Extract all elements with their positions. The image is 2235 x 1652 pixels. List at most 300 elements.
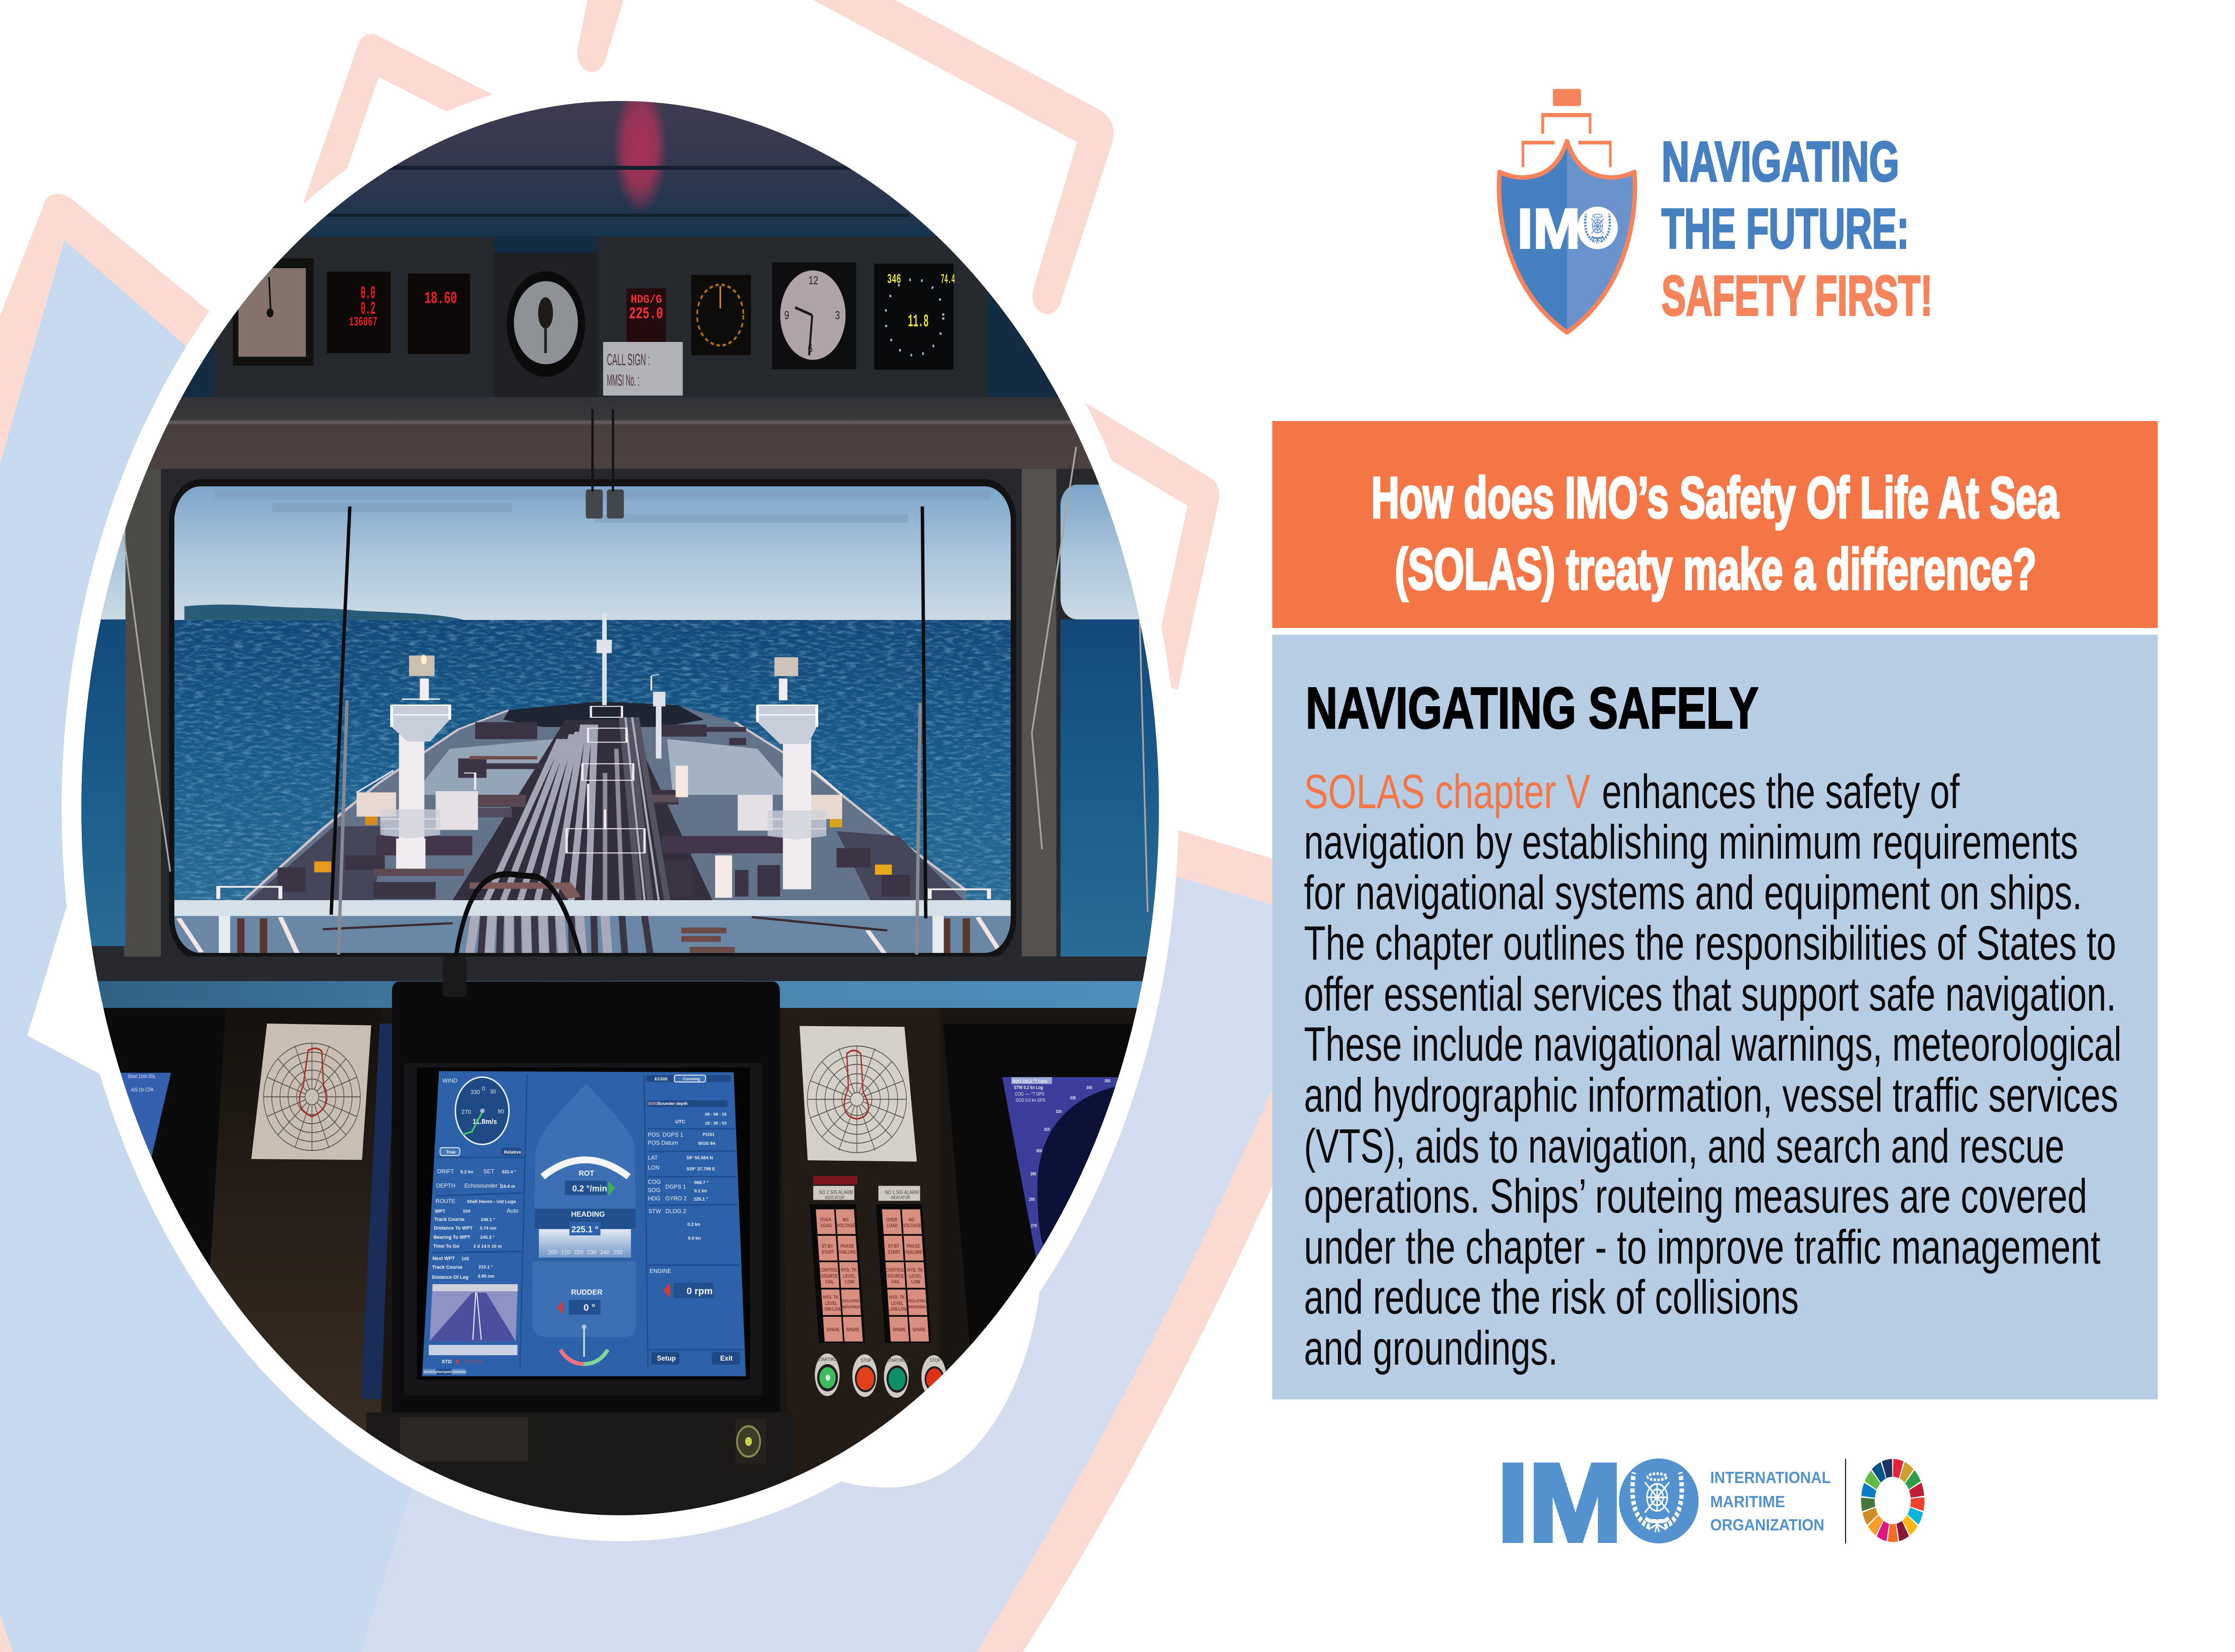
left data rows: Auto (507, 1208, 519, 1214)
right data rows: 59° 55.584 N (687, 1156, 713, 1161)
window rail bar (170, 900, 1014, 916)
tagline line 1: NAVIGATING (1661, 130, 1899, 193)
right data rows: 028° 37.799 E (687, 1167, 715, 1172)
right side radar screen: 290 (1030, 1171, 1036, 1176)
right data rows: 0.0 kn (688, 1236, 701, 1241)
alarm tiles left: ST-BY (822, 1244, 834, 1249)
left data rows: Shell Haven - Ust Luga (467, 1199, 516, 1204)
top right screen buttons: SENS (648, 1101, 658, 1106)
screen dividers (433, 1074, 743, 1367)
alarm tiles left: LOAD (820, 1223, 832, 1229)
left data rows: 105 (462, 1256, 469, 1262)
call sign plate: MMSI No. : (607, 371, 640, 389)
alarm tiles right: HYD. TK (889, 1295, 905, 1300)
start and stop push buttons: STOP (861, 1358, 872, 1364)
true and relative buttons: Relative (504, 1150, 521, 1155)
alarm label plates: NO 1 S/G ALARM (885, 1189, 919, 1196)
alarm label plates (813, 1186, 920, 1201)
white triangle left (27, 907, 204, 1074)
alarm tiles right: ISOLATING (908, 1298, 926, 1303)
left data rows: Distance To WPT (434, 1226, 473, 1231)
heading display: HDG/G (631, 293, 662, 306)
ship silhouette panel (534, 1083, 636, 1209)
alarm tiles left: NO (843, 1217, 849, 1223)
left data rows: DEPTH (436, 1183, 455, 1189)
setup and exit buttons (651, 1352, 740, 1365)
right data rows: POS1 (703, 1132, 715, 1137)
alarm tiles left: PHASE (840, 1244, 854, 1249)
alarm tiles right: HYD. TK (907, 1268, 924, 1273)
UN emblem (1632, 1472, 1682, 1532)
right data rows: LON (648, 1165, 659, 1171)
photo: ship bridge view (68, 80, 1175, 1564)
pink band right (1124, 813, 1272, 905)
right data rows: POS (648, 1132, 660, 1138)
right side radar screen: 310 (1044, 1127, 1050, 1132)
alarm label plates: INDICATOR (825, 1195, 844, 1200)
heading display: 225.0 (629, 305, 663, 323)
cross pipes (314, 756, 892, 898)
dark pipe bed (452, 720, 713, 900)
alarm tiles right: OVER (886, 1217, 898, 1223)
right data rows: LAT (648, 1155, 658, 1161)
alarm tiles right: ST-BY (888, 1244, 899, 1249)
call sign plate (603, 342, 683, 396)
left data rows: SET (483, 1168, 494, 1175)
wind dial: 30 (490, 1088, 496, 1095)
speed display: 136067 (349, 316, 377, 329)
analog meter (233, 258, 314, 366)
body paragraph: enhances the safety of (1602, 765, 1960, 819)
background: decorative shapes (0, 0, 1272, 1652)
right data rows: 225.1 ° (694, 1197, 708, 1202)
body paragraph: and reduce the risk of collisions (1304, 1270, 1799, 1324)
speed display (327, 272, 391, 353)
alarm header strip (813, 1176, 857, 1184)
heading indicator: 210 (561, 1249, 570, 1256)
logo: navigating the future shield (1499, 89, 1932, 333)
wind instrument: 74.4 (941, 272, 955, 287)
alarm tiles left: HYD. TK (841, 1268, 857, 1273)
banner heading text: (SOLAS) treaty make a difference? (1395, 537, 2037, 602)
wind dial: 270 (462, 1109, 471, 1115)
polar diagram left (251, 1024, 371, 1160)
body paragraph: offer essential services that support safe navigation. (1304, 967, 2116, 1021)
right data rows: HDG (648, 1195, 660, 1202)
organization name (1710, 1468, 1831, 1534)
body paragraph: operations. Ships’ routeing measures are covered (1304, 1169, 2087, 1223)
alarm tiles right: SOURCE (887, 1273, 904, 1279)
right data rows (648, 1112, 726, 1274)
body paragraph: These include navigational warnings, meteorological (1304, 1017, 2121, 1071)
right data rows: WGS 84 (698, 1142, 715, 1146)
overhead instrument panel (215, 237, 987, 397)
sea waves (170, 620, 1015, 919)
panel housing (215, 237, 494, 397)
body paragraph: for navigational systems and equipment on ships. (1304, 866, 2082, 920)
true and relative buttons: True (446, 1150, 455, 1155)
right panel: navigating safely text (1272, 635, 2158, 1399)
body paragraph: under the chapter - to improve traffic management (1304, 1220, 2100, 1274)
right side radar screen (1002, 1077, 1148, 1265)
bow dark equipment (503, 702, 704, 727)
right data rows: POS Datum (648, 1140, 678, 1146)
beam above window (74, 397, 1172, 471)
silver rods (338, 700, 920, 955)
left data rows: Echosounder 1 (464, 1183, 502, 1189)
heading indicator: 200 (548, 1249, 557, 1256)
white pipe rack railings (357, 706, 842, 853)
window sill (68, 957, 1175, 1008)
left data rows: Time To Go (433, 1243, 460, 1249)
left data rows: Next WPT (433, 1256, 455, 1261)
side window ropes (123, 447, 1147, 912)
light deck areas (413, 739, 554, 795)
alarm tiles right: ABNORMAL (908, 1304, 927, 1309)
top right screen buttons (646, 1075, 731, 1107)
left data rows: 210.1 ° (478, 1265, 493, 1270)
main window pane (172, 483, 1013, 957)
polar diagram right (800, 1026, 917, 1162)
lamp cable clips on beam (586, 409, 624, 518)
pale blue background shape (0, 240, 613, 1652)
organization name: ORGANIZATION (1710, 1516, 1824, 1534)
alarm tiles left: LEVEL (843, 1273, 856, 1279)
left data rows: Distance Of Leg (432, 1275, 468, 1280)
left radar screen: AIS On CPA (131, 1087, 154, 1093)
depth display: 18.60 (424, 290, 457, 308)
pink frame left (0, 194, 211, 464)
right data rows: STW (649, 1208, 661, 1214)
screen (422, 1071, 746, 1376)
right data rows: GYRO 2 (666, 1195, 687, 1202)
control knob (736, 1419, 766, 1464)
pink frame right (1073, 416, 1205, 685)
body paragraph: (VTS), aids to navigation, and search and rescue (1304, 1119, 2064, 1173)
left window pillar (124, 469, 161, 974)
pink frame top right (813, 0, 1114, 314)
white halo bump (817, 1290, 1040, 1488)
pink frame top left (317, 53, 504, 210)
lower deck (168, 914, 1020, 957)
unit housing (392, 982, 780, 1440)
call sign plate: CALL SIGN : (607, 350, 650, 369)
logo: International Maritime Organization (1497, 1441, 1928, 1564)
blue edge strip (361, 1024, 395, 1399)
right side radar screen: SOG 0.0 kn GPS (1016, 1098, 1046, 1104)
body paragraph: navigation by establishing minimum requirements (1304, 815, 2078, 869)
alarm tiles right: LEVEL (909, 1273, 922, 1279)
start and stop push buttons: START/RUN (887, 1358, 909, 1364)
alarm tiles left: VOLTAGE (837, 1223, 856, 1229)
heading indicator: 220 (574, 1249, 583, 1256)
body paragraph: and hydrographic information, vessel traffic services (1304, 1068, 2118, 1122)
ship view through the window (168, 605, 1020, 957)
alarm tiles right: SPARE (912, 1327, 926, 1333)
polar ship outline left (299, 1048, 326, 1117)
side deck dark gear (249, 826, 385, 900)
3D route view (429, 1284, 518, 1355)
right side radar screen: COG ---- °T GPS (1015, 1092, 1045, 1097)
banner heading text (1371, 465, 2059, 602)
screen tabs: Docking (424, 1370, 437, 1374)
alarm tiles right: FAIL (892, 1280, 900, 1285)
wall clock: 3 (835, 308, 840, 322)
land on horizon (185, 605, 464, 620)
left radar screen: Short 1min 00s (128, 1074, 155, 1079)
speed display: 0.2 (361, 299, 375, 319)
heading indicator: 250 (613, 1249, 623, 1256)
shield IM letters: IM (1517, 197, 1581, 260)
right data rows: 08 - 08 - 16 (705, 1112, 726, 1117)
polar ship outline right (844, 1050, 869, 1119)
left deck crane (380, 655, 450, 868)
wind dial: WIND (443, 1078, 457, 1084)
left data rows: 245.3 ° (480, 1235, 494, 1240)
cross track distance: 0.17 nm (465, 1359, 482, 1365)
amber gauge (692, 275, 751, 355)
right data rows: ENGINE (649, 1268, 671, 1274)
left data rows: 2 d 14 h 10 m (473, 1244, 502, 1249)
wind instrument (874, 264, 955, 370)
right side radar screen: 270 (1031, 1223, 1037, 1228)
bridge window frame (70, 397, 1172, 980)
right brown console (780, 1008, 940, 1562)
left data rows: 104 (463, 1209, 470, 1214)
heading indicator: HEADING (571, 1210, 605, 1218)
shield left half (1499, 141, 1567, 333)
IM letters: IM (1497, 1441, 1622, 1564)
setup and exit buttons: Setup (657, 1355, 676, 1362)
right side radar screen: 280 (1029, 1197, 1035, 1202)
heading indicator: 230 (587, 1249, 596, 1256)
bezel (404, 1063, 763, 1395)
sea texture (170, 620, 1015, 919)
gooseneck lamp cable (451, 874, 589, 997)
frame wall (74, 469, 1172, 980)
depth display (408, 274, 470, 354)
alarm tiles left: SOURCE (821, 1273, 838, 1279)
photo base (68, 89, 1175, 1564)
alarm tiles left: SPARE (846, 1327, 860, 1333)
lavender background shape (361, 860, 1272, 1652)
wall clock: 6 (808, 341, 813, 355)
highlighted lead: SOLAS chapter V (1304, 765, 1590, 819)
left data rows: 3.74 nm (480, 1226, 497, 1231)
shield emblem (1585, 214, 1610, 244)
wall clock (772, 262, 856, 369)
heading indicator: 225.1 ° (571, 1225, 598, 1235)
pink short stroke top (577, 0, 624, 72)
left brown console (191, 1008, 381, 1562)
alarm tiles left: LOW (845, 1280, 855, 1285)
alarm tiles left: OVER (820, 1217, 831, 1223)
main window black frame (172, 483, 1013, 957)
alarm label plates: INDICATOR (891, 1195, 910, 1200)
top right screen buttons: ECDIS (655, 1077, 667, 1082)
alarm tiles right: LOAD (886, 1223, 898, 1229)
right side radar screen: HDG 225.1 °T Gyro (1012, 1079, 1047, 1084)
rate of turn indicator: 0.2 °/min (572, 1184, 607, 1194)
left data rows (432, 1168, 519, 1280)
start and stop push buttons: STOP (930, 1358, 940, 1364)
right side window (1061, 485, 1168, 957)
logo divider (1845, 1459, 1846, 1543)
section heading: NAVIGATING SAFELY (1306, 675, 1758, 741)
wind dial: 90 (498, 1108, 504, 1115)
SDG wheel (1858, 1454, 1928, 1547)
wind dial: 0 (482, 1086, 485, 1092)
wall clock: 12 (809, 274, 818, 287)
top right screen buttons: Sounder depth (658, 1101, 687, 1106)
left data rows: ROUTE (435, 1198, 455, 1204)
left side window (70, 506, 126, 946)
pink curved stripe bottom right (977, 1090, 1272, 1652)
screen tabs: NavData (453, 1370, 467, 1374)
alarm tiles right: VOLTAGE (903, 1223, 921, 1229)
rudder indicator (533, 1261, 636, 1364)
right data rows: 0.2 kn (687, 1222, 700, 1227)
centre pipelines (486, 717, 667, 900)
alarm tiles left: FAILURE (839, 1250, 856, 1255)
alarm tiles right: SPARE (892, 1327, 906, 1333)
right panel: question banner (1272, 421, 2158, 628)
left data rows: Track Course (434, 1217, 464, 1222)
O oval (1619, 1458, 1699, 1543)
setup and exit buttons: Exit (720, 1355, 733, 1362)
alarm tiles left: ABNORMAL (842, 1304, 861, 1309)
right data rows: COG (648, 1179, 661, 1185)
wind instrument: 11.8 (908, 311, 929, 332)
body paragraph: The chapter outlines the responsibilities of States to (1304, 916, 2116, 970)
alarm tiles right (876, 1204, 931, 1343)
left data rows: Track Course (432, 1265, 463, 1270)
body paragraph: and groundings. (1304, 1321, 1558, 1375)
right window pillar (1022, 469, 1056, 974)
window rods (331, 506, 926, 955)
left data rows: 3.85 nm (478, 1274, 494, 1279)
right side radar screen: 350 (1105, 1078, 1110, 1083)
right dark console (943, 1024, 1175, 1562)
heading display (627, 288, 666, 342)
engine readout: 0 rpm (687, 1285, 713, 1296)
wind dial: 330 (471, 1089, 480, 1096)
left dark console (68, 1008, 228, 1562)
forward mast (597, 613, 666, 759)
alarm tiles right: CONTROL (886, 1268, 905, 1273)
right data rows: UTC (675, 1119, 685, 1125)
left data rows: DRIFT (437, 1168, 454, 1175)
right deck crane (758, 657, 827, 889)
heading indicator: 240 (600, 1249, 610, 1256)
alarm tiles left: ISOLATING (842, 1298, 860, 1303)
ceiling (181, 101, 1058, 397)
rudder indicator: 0 ° (583, 1302, 595, 1313)
ship bridge blocks (1522, 89, 1611, 167)
left data rows: 0.2 kn (460, 1170, 473, 1175)
right data rows: 0.1 kn (694, 1189, 707, 1194)
left data rows: Bearing To WPT (434, 1235, 470, 1240)
round compass dial (507, 271, 585, 377)
heading indicator (535, 1209, 636, 1258)
start and stop push buttons: START/RUN (818, 1357, 839, 1363)
banner heading text: How does IMO’s Safety Of Life At Sea (1371, 465, 2059, 530)
alarm label plates: NO 2 S/G ALARM (819, 1189, 853, 1196)
right side radar screen: 320 (1056, 1109, 1062, 1114)
alarm tiles left: CONTROL (819, 1268, 839, 1273)
alarm tiles left (810, 1204, 865, 1343)
wind instrument: 346 (887, 272, 901, 287)
right side radar screen: STW 0.2 kn Log (1014, 1085, 1043, 1091)
wind dial: 11.8m/s (472, 1118, 497, 1126)
left data rows: WPT (435, 1209, 446, 1214)
tagline line 2: THE FUTURE: (1661, 197, 1909, 260)
white deck stair rails at bar (218, 887, 989, 899)
alarm tiles right: NO (909, 1217, 915, 1223)
cross track distance: XTD (442, 1359, 451, 1365)
deck machinery (278, 722, 910, 899)
alarm tiles left: HYD. TK (823, 1295, 839, 1300)
alarm tiles right: LOW-LOW (888, 1307, 908, 1312)
white deck houses (357, 766, 842, 898)
wind dial (443, 1077, 509, 1144)
rudder indicator: RUDDER (571, 1289, 603, 1297)
alarm tiles right: START (887, 1250, 901, 1255)
right side radar screen: 330 (1070, 1095, 1076, 1100)
screen tabs (423, 1369, 467, 1374)
pink corner bottom left (0, 1614, 13, 1652)
engine readout (664, 1283, 713, 1298)
alarm tiles left: SPARE (826, 1327, 840, 1333)
right data rows: 18 : 30 : 53 (705, 1121, 726, 1126)
speed display: 0.0 (361, 283, 375, 303)
shield O oval (1577, 206, 1618, 249)
alarm tiles left: FAIL (826, 1280, 834, 1285)
body paragraph (1304, 765, 2121, 1375)
white halo circle (62, 75, 1179, 1541)
right data rows: SOG (648, 1187, 660, 1193)
screen tabs: Navigation (437, 1370, 455, 1374)
lower plaque (400, 1417, 528, 1462)
alarm tiles right: FAILURE (905, 1250, 923, 1255)
rate of turn indicator: ROT (579, 1170, 594, 1178)
right data rows: DLOG 2 (666, 1208, 686, 1214)
left radar screen (119, 1073, 171, 1164)
tanker deck (244, 702, 966, 900)
alarm tiles left: LOW-LOW (822, 1307, 842, 1312)
main conning display unit (367, 957, 792, 1564)
shield outline (1499, 141, 1635, 333)
wall clock: 9 (784, 308, 789, 322)
right data rows: DGPS 1 (666, 1184, 686, 1190)
tagline line 3: SAFETY FIRST! (1661, 264, 1932, 327)
left data rows: 332.4 ° (502, 1170, 516, 1175)
black wiper rods (331, 506, 926, 919)
cross track distance (442, 1358, 482, 1365)
right data rows: DGPS 1 (662, 1132, 683, 1138)
organization name: MARITIME (1710, 1492, 1785, 1511)
right side radar screen: 300 (1036, 1148, 1042, 1153)
organization name: INTERNATIONAL (1710, 1468, 1831, 1487)
lamp foot (443, 957, 467, 997)
alarm tiles right: PHASE (907, 1244, 920, 1249)
true and relative buttons (440, 1147, 521, 1155)
left data rows: 18.6 m (501, 1184, 515, 1189)
alarm tiles right: LOW (911, 1280, 921, 1285)
left data rows: 246.1 ° (481, 1218, 495, 1222)
right data rows: 068.7 ° (694, 1180, 708, 1185)
top right screen buttons: Conning (683, 1077, 700, 1082)
